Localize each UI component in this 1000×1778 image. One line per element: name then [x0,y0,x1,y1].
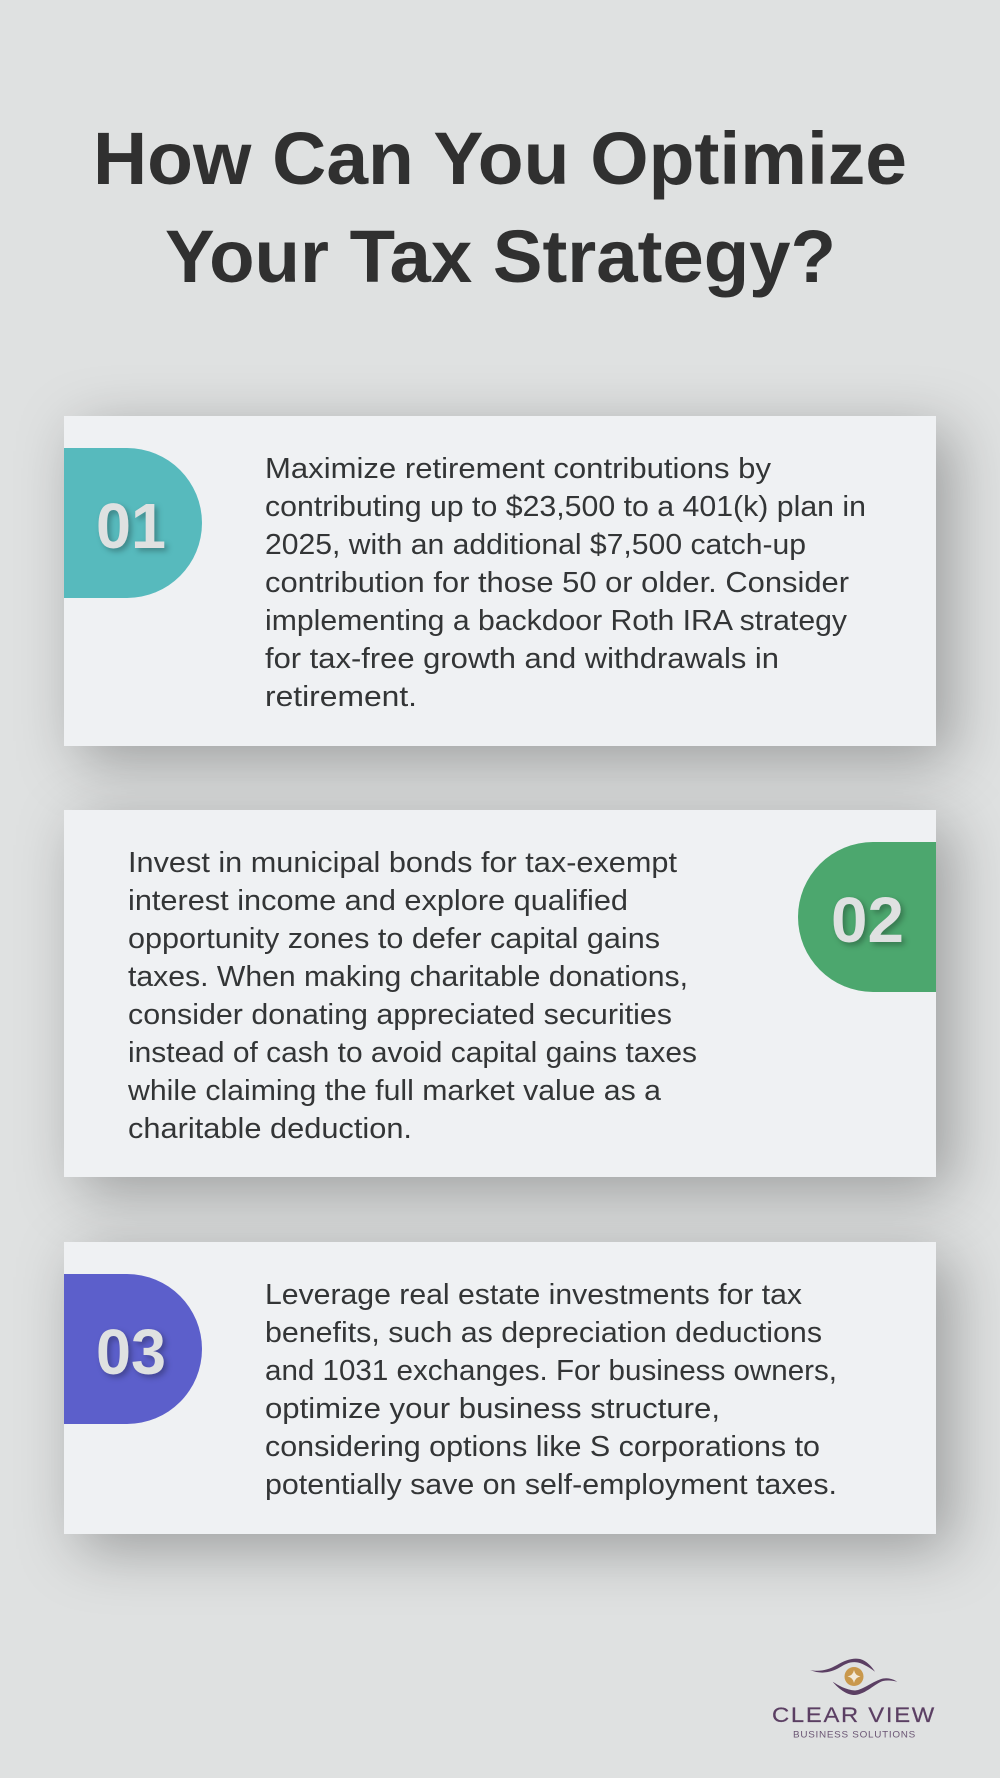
logo wordmark: CLEAR VIEW [772,1704,936,1727]
card background 03 [64,1242,936,1534]
badge 02: 02 [831,884,904,956]
text block 02: charitable deduction. [128,1113,412,1145]
badge 02 [798,842,936,992]
badge 03 [64,1274,202,1424]
text block 02: consider donating appreciated securities [128,999,672,1031]
text block 03: considering options like S corporations to [265,1431,820,1463]
text block 01: Maximize retirement contributions by [265,453,772,485]
logo: Clear View Business Solutions [772,1659,936,1740]
title [93,117,907,298]
text block 02: while claiming the full market value as a [127,1075,662,1107]
text block 01: contribution for those 50 or older. Consider [265,567,849,599]
text block 03 [265,1279,837,1501]
text block 03: and 1031 exchanges. For business owners, [265,1355,837,1387]
panel: step 03 [64,1242,936,1534]
text block 03: benefits, such as depreciation deductions [265,1317,822,1349]
text block 01: implementing a backdoor Roth IRA strategy [265,605,848,637]
logo tagline: BUSINESS SOLUTIONS [793,1730,916,1740]
text block 01: retirement. [265,681,417,713]
text block 02: interest income and explore qualified [128,885,628,917]
badge 01: 01 [96,490,166,562]
card background 02 [64,810,936,1177]
panel: step 01 [64,416,936,746]
icon: gold star circle [844,1667,864,1686]
icon: eye swooshes [810,1659,897,1695]
text block 03: potentially save on self-employment taxes. [265,1469,837,1501]
title: Your Tax Strategy? [165,215,836,298]
text block 01 [265,453,866,713]
badge 03: 03 [96,1316,166,1388]
text block 03: optimize your business structure, [265,1393,720,1425]
text block 02: opportunity zones to defer capital gains [128,923,660,955]
text block 01: for tax-free growth and withdrawals in [265,643,779,675]
text block 02: Invest in municipal bonds for tax-exempt [128,847,677,879]
text block 03: Leverage real estate investments for tax [265,1279,803,1311]
text block 02: taxes. When making charitable donations, [128,961,688,993]
panel: step 02 [64,810,936,1177]
card background 01 [64,416,936,746]
title: How Can You Optimize [93,117,907,200]
badge 01 [64,448,202,598]
text block 01: 2025, with an additional $7,500 catch-up [265,529,806,561]
text block 02 [127,847,697,1145]
text block 02: instead of cash to avoid capital gains taxes [128,1037,697,1069]
text block 01: contributing up to $23,500 to a 401(k) plan in [265,491,866,523]
